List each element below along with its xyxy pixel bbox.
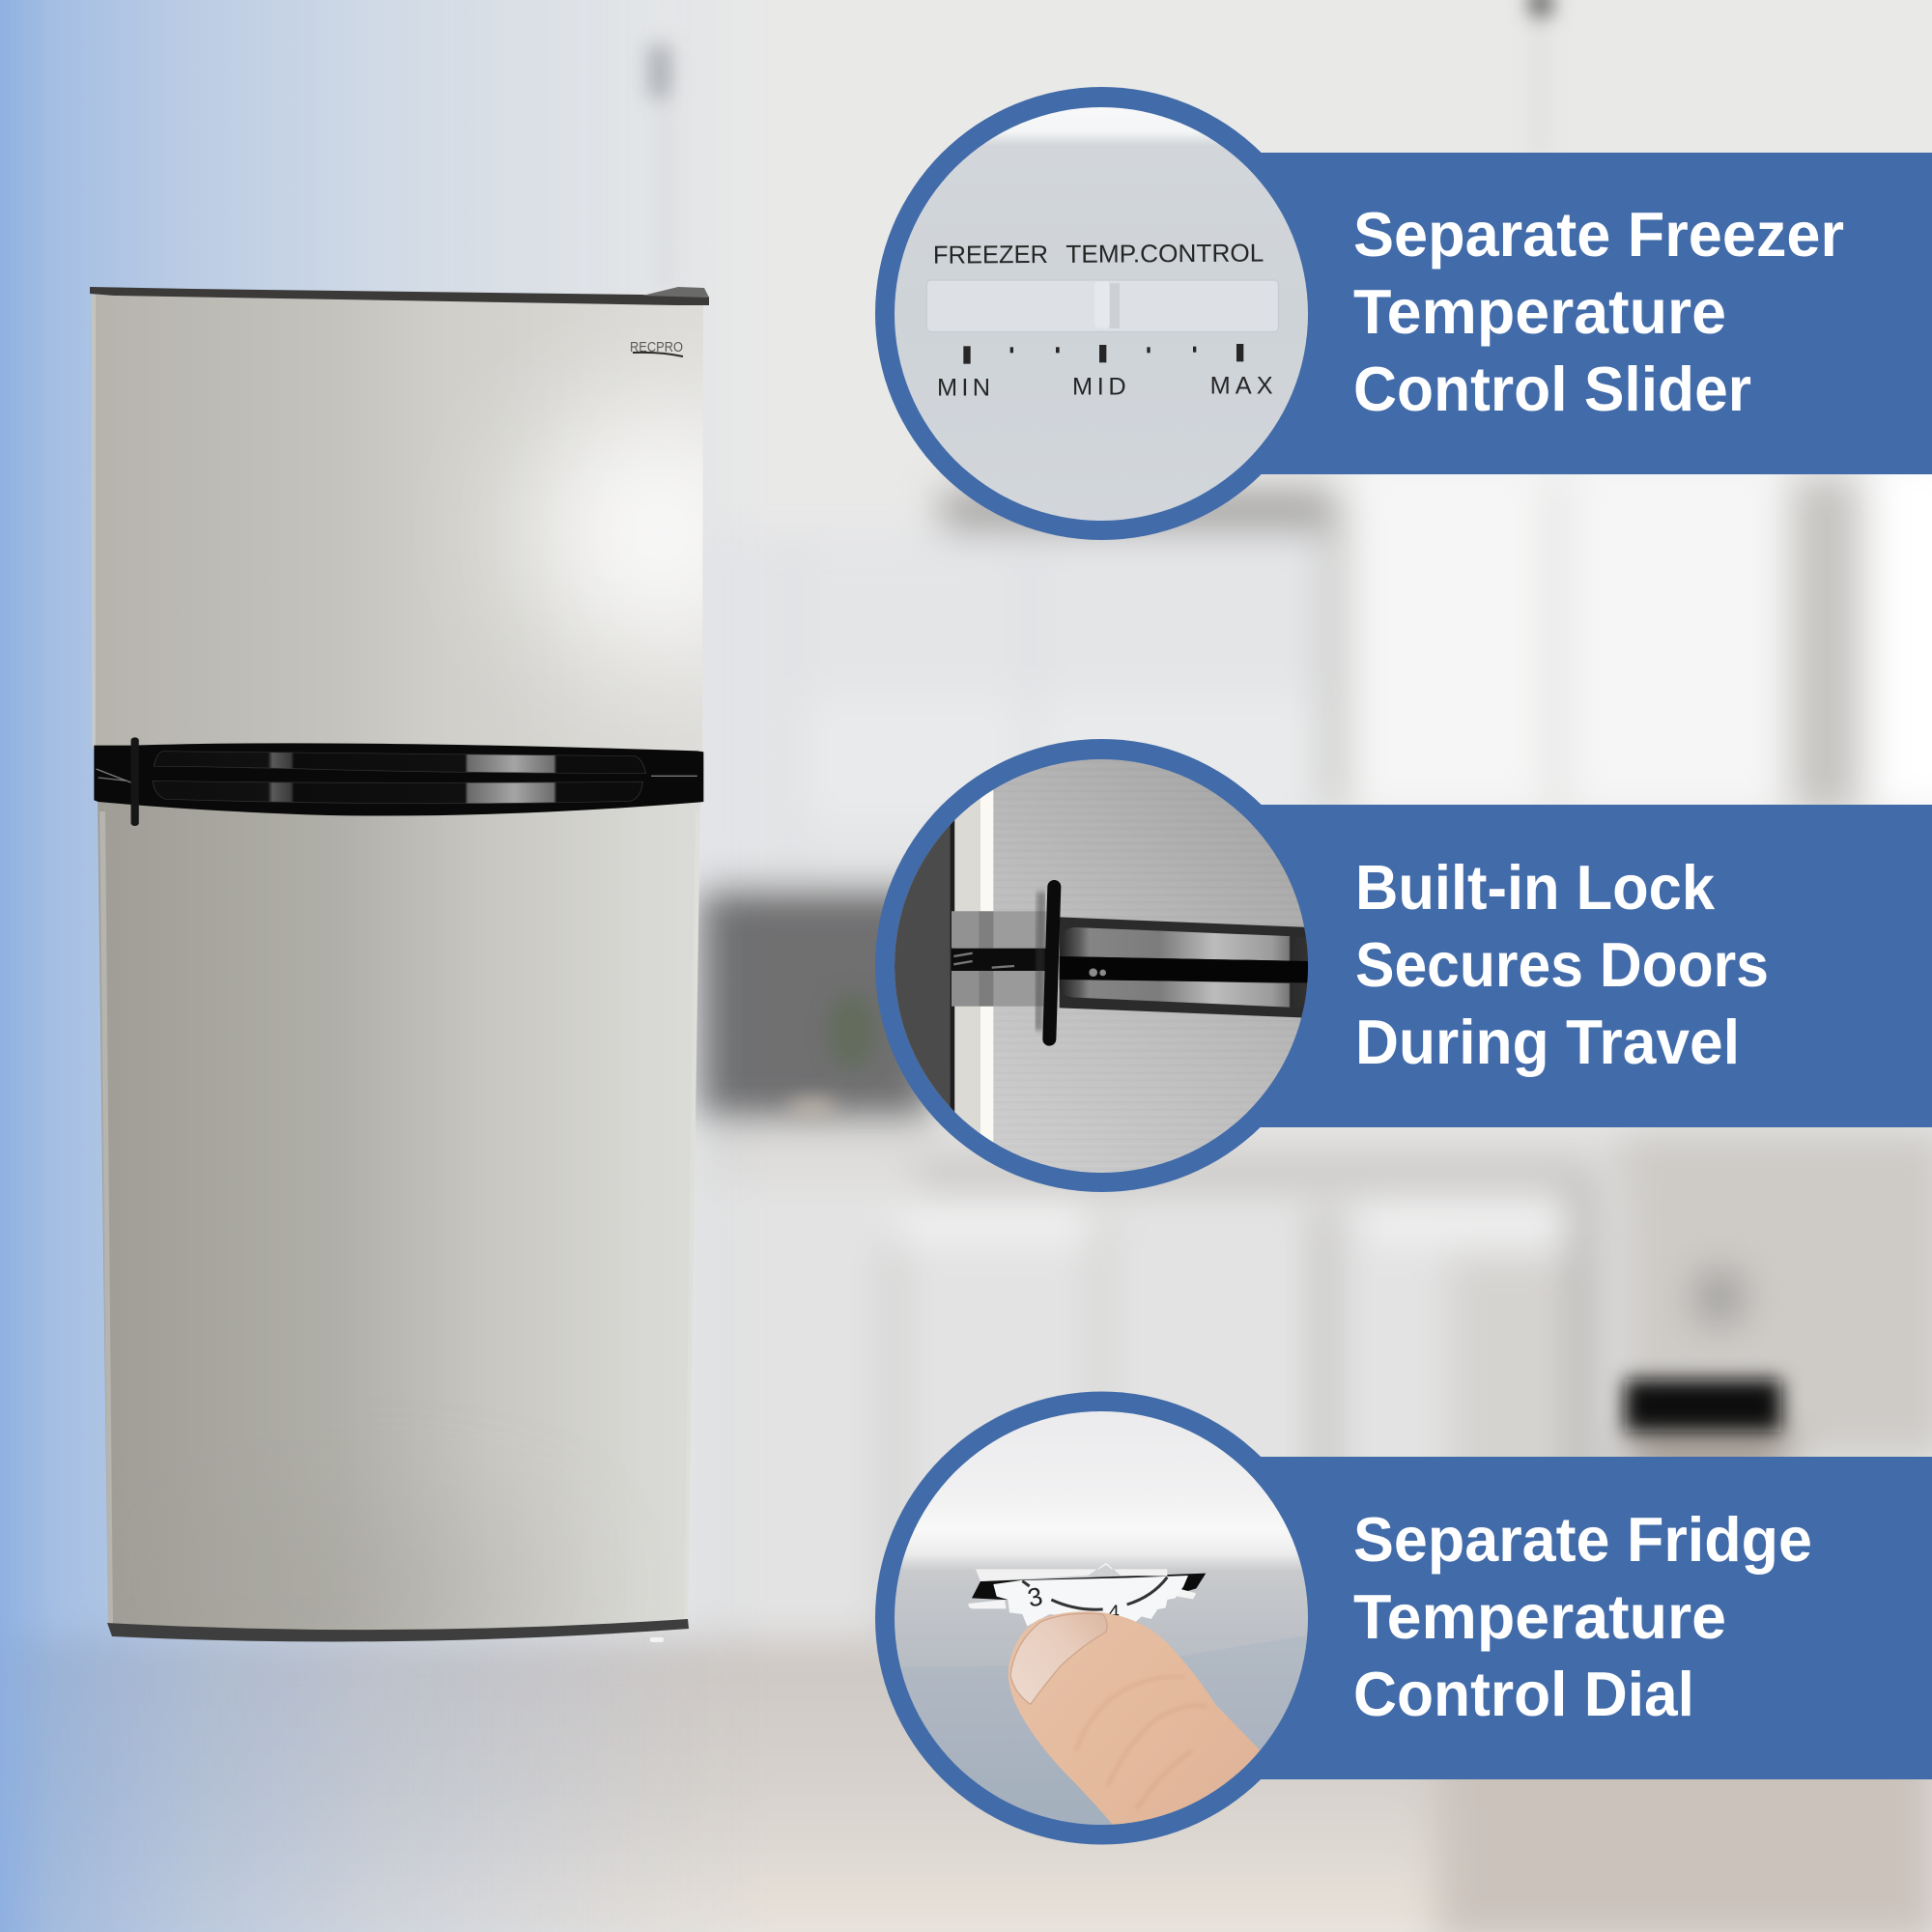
heading: Secures Doors [1355,929,1769,1000]
foot [650,1637,664,1642]
handle [1060,917,1309,1019]
slot lip [976,1563,1167,1581]
blue band [1256,805,1932,1127]
dial wheel: 3 [1025,1581,1045,1613]
heading: Separate Fridge [1353,1504,1812,1575]
slider track [926,280,1278,331]
thumbnail [1010,1613,1107,1704]
slider knob [1094,281,1120,328]
brand logo: RECPRO [630,339,683,355]
feature 1: freezer temperature slider [875,87,1932,540]
hinge [952,911,1048,1007]
heading: Control Slider [1353,354,1751,424]
lock bar [1038,887,1054,1039]
blue ring [875,87,1328,540]
close-up: door lock [892,756,1311,1176]
heading: Temperature [1353,276,1726,347]
close-up: dial and thumb [892,1409,1311,1838]
thumb [1009,1611,1261,1838]
bottom trim [107,1619,689,1641]
lock bar [131,737,139,826]
slider label [935,243,1264,264]
blue ring [875,739,1328,1192]
scale labels: MAX [1210,372,1273,399]
scale labels: MID [1072,373,1126,400]
top trim bar [90,287,709,305]
heading [1355,852,1769,1077]
tick marks [963,344,1243,364]
blue band [1256,153,1932,474]
heading: During Travel [1355,1007,1740,1077]
scale labels: MIN [937,374,990,401]
scale labels [939,377,1272,396]
door handle band [94,737,703,826]
blue ring [875,1391,1328,1845]
feature 2: door lock [875,739,1932,1192]
heading [1353,199,1844,424]
dial slot [972,1574,1206,1600]
blue band [1256,1457,1932,1779]
slider label: TEMP.CONTROL [1065,239,1264,269]
slider label: FREEZER [933,240,1048,270]
upper freezer door [92,295,703,752]
close-up: slider panel [892,104,1311,524]
feature 3: fridge temperature dial [875,1391,1932,1845]
heading: Built-in Lock [1355,852,1716,923]
heading: Temperature [1353,1581,1726,1652]
heading: Separate Freezer [1353,199,1844,270]
dial wheel: 4 [1108,1601,1120,1623]
rivet [1089,968,1106,977]
dial wheel [993,1576,1188,1626]
heading [1353,1504,1812,1729]
lower fridge door [98,797,700,1642]
refrigerator [90,287,709,1642]
heading: Control Dial [1353,1659,1694,1729]
